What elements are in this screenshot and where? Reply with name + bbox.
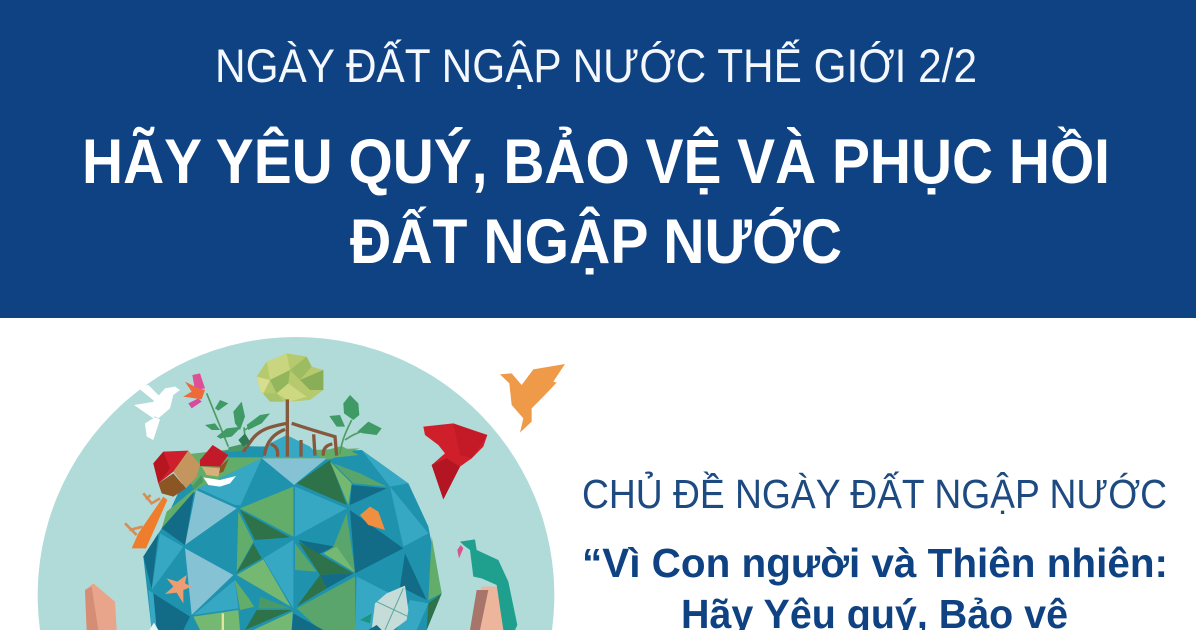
flower xyxy=(183,373,205,408)
tree with mangrove roots xyxy=(243,353,337,457)
orange shell xyxy=(360,507,385,530)
starfish xyxy=(165,575,192,603)
orange origami bird xyxy=(500,364,565,433)
header banner xyxy=(0,0,1196,318)
pale teal backdrop circle xyxy=(38,337,554,630)
globe facets xyxy=(143,445,442,630)
main title line 1: HÃY YÊU QUÝ, BẢO VỆ VÀ PHỤC HỒI xyxy=(82,126,1110,197)
globe top: pool and ground xyxy=(223,435,358,457)
left rock xyxy=(85,583,117,630)
main title line 2: ĐẤT NGẬP NƯỚC xyxy=(350,206,842,277)
teal parrot xyxy=(457,539,517,630)
rock boulders xyxy=(153,445,229,497)
header subtitle: NGÀY ĐẤT NGẬP NƯỚC THẾ GIỚI 2/2 xyxy=(215,39,977,92)
right rock xyxy=(470,587,503,630)
small white fish xyxy=(149,623,158,630)
red origami bird xyxy=(423,423,487,499)
plants xyxy=(205,393,382,454)
illustration: origami globe xyxy=(38,337,565,630)
orange boat xyxy=(125,493,167,548)
turtle xyxy=(360,586,408,630)
theme quote line 1: “Vì Con người và Thiên nhiên: xyxy=(582,540,1168,586)
paper boat xyxy=(203,476,236,487)
white dove xyxy=(134,385,180,440)
